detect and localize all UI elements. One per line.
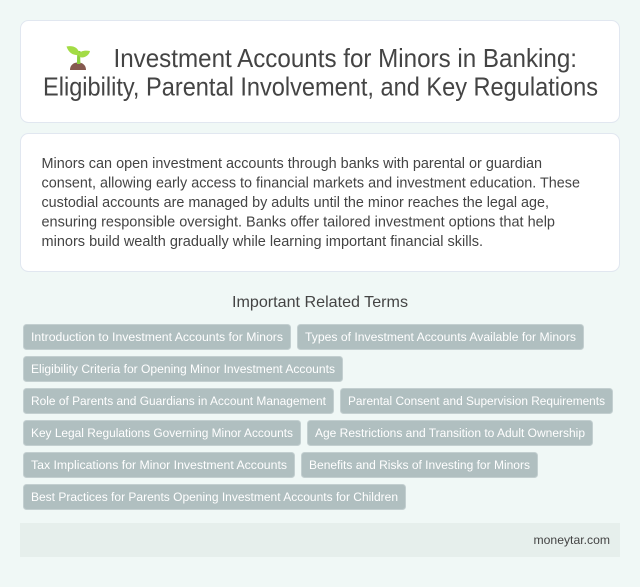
tag: introduction: [24, 324, 290, 350]
title: [43, 45, 598, 102]
tag: legal regulations: Key Legal Regulations Governing Minor Accounts: [31, 426, 293, 440]
tag: age restrictions: Age Restrictions and Transition to Adult Ownership: [315, 426, 585, 440]
panel: title card: [20, 20, 620, 122]
tag: account types: Types of Investment Accounts Available for Minors: [305, 330, 576, 344]
tag: tax implications: [24, 452, 294, 478]
tag: tax implications: Tax Implications for Minor Investment Accounts: [31, 458, 287, 472]
text block: summary paragraph: minors build wealth gradually while learning important financial skills.: [42, 234, 483, 250]
tag: best practices: [24, 484, 406, 510]
text block: summary paragraph: custodial accounts are managed by adults until the minor reaches the legal age,: [42, 195, 549, 211]
heading: related terms: Important Related Terms: [232, 294, 408, 311]
tag: role of parents: Role of Parents and Guardians in Account Management: [31, 394, 327, 408]
tag: legal regulations: [24, 420, 300, 446]
tag: benefits and risks: Benefits and Risks of Investing for Minors: [309, 458, 530, 472]
panel: related term tags: [24, 324, 612, 510]
footer: source credit: moneytar.com: [534, 533, 610, 547]
panel: summary card: [20, 134, 620, 272]
tag: benefits and risks: [302, 452, 538, 478]
title: Investment Accounts for Minors in Banking:: [114, 45, 577, 73]
tag: parental consent: Parental Consent and Supervision Requirements: [348, 394, 605, 408]
tag: account types: [298, 324, 584, 350]
icon: seedling: [66, 46, 90, 70]
title: Eligibility, Parental Involvement, and Key Regulations: [43, 74, 598, 102]
text block: summary paragraph: Minors can open investment accounts through banks with parental or guardian: [42, 156, 542, 172]
text block: summary paragraph: consent, allowing early access to financial markets and investment education. These: [42, 176, 580, 192]
text block: summary paragraph: [42, 156, 580, 250]
tag: age restrictions: [308, 420, 592, 446]
tag: introduction: Introduction to Investment Accounts for Minors: [31, 330, 283, 344]
tag: eligibility: [24, 356, 342, 382]
text block: summary paragraph: ensuring responsible oversight. Banks offer tailored investment options that help: [42, 214, 555, 230]
footer bar: [20, 523, 620, 557]
tag: parental consent: [340, 388, 612, 414]
tag: eligibility: Eligibility Criteria for Opening Minor Investment Accounts: [31, 362, 335, 376]
tag: best practices: Best Practices for Parents Opening Investment Accounts for Children: [31, 490, 398, 504]
tag: role of parents: [24, 388, 334, 414]
